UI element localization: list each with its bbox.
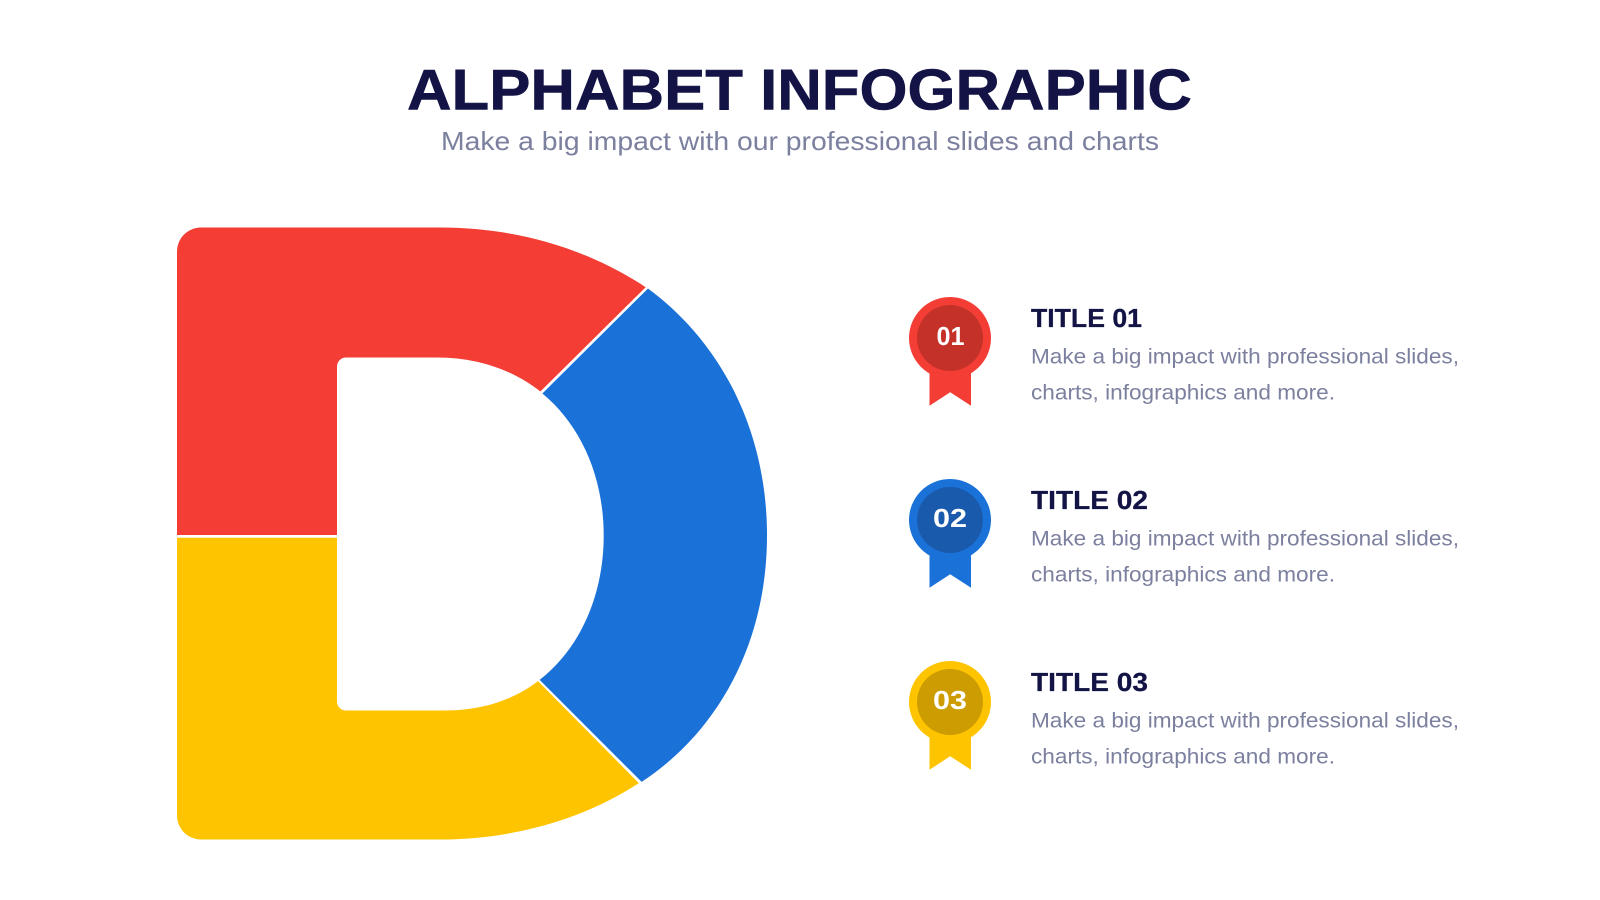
segment: red top bbox=[177, 228, 646, 535]
text block: description 03: Make a big impact with professional slides, bbox=[1031, 708, 1459, 732]
list item 02 bbox=[909, 479, 1459, 588]
icon: blue medal 02 bbox=[909, 479, 991, 588]
icon: yellow medal 03: 03 bbox=[933, 685, 967, 715]
text block: description 03: charts, infographics and more. bbox=[1031, 744, 1335, 768]
title: ALPHABET INFOGRAPHIC bbox=[407, 58, 1192, 122]
text block: description 02: charts, infographics and more. bbox=[1031, 562, 1335, 586]
icon: yellow medal 03 bbox=[909, 661, 991, 770]
heading: title 02: TITLE 02 bbox=[1031, 485, 1148, 515]
segment: blue right bbox=[540, 288, 767, 782]
subtitle: Make a big impact with our professional slides and charts bbox=[441, 126, 1159, 156]
list item 01 bbox=[909, 297, 1459, 406]
heading: title 01: TITLE 01 bbox=[1031, 303, 1142, 333]
segment: yellow bottom bbox=[177, 538, 639, 840]
text block: description 01: Make a big impact with professional slides, bbox=[1031, 344, 1459, 368]
text block: description 01: charts, infographics and more. bbox=[1031, 380, 1335, 404]
letter D chart bbox=[177, 228, 767, 840]
heading: title 03: TITLE 03 bbox=[1031, 667, 1148, 697]
text block: description 02: Make a big impact with professional slides, bbox=[1031, 526, 1459, 550]
list item 03 bbox=[909, 661, 1459, 770]
icon: red medal 01 bbox=[909, 297, 991, 406]
icon: red medal 01: 01 bbox=[936, 321, 964, 351]
icon: blue medal 02: 02 bbox=[933, 503, 967, 533]
